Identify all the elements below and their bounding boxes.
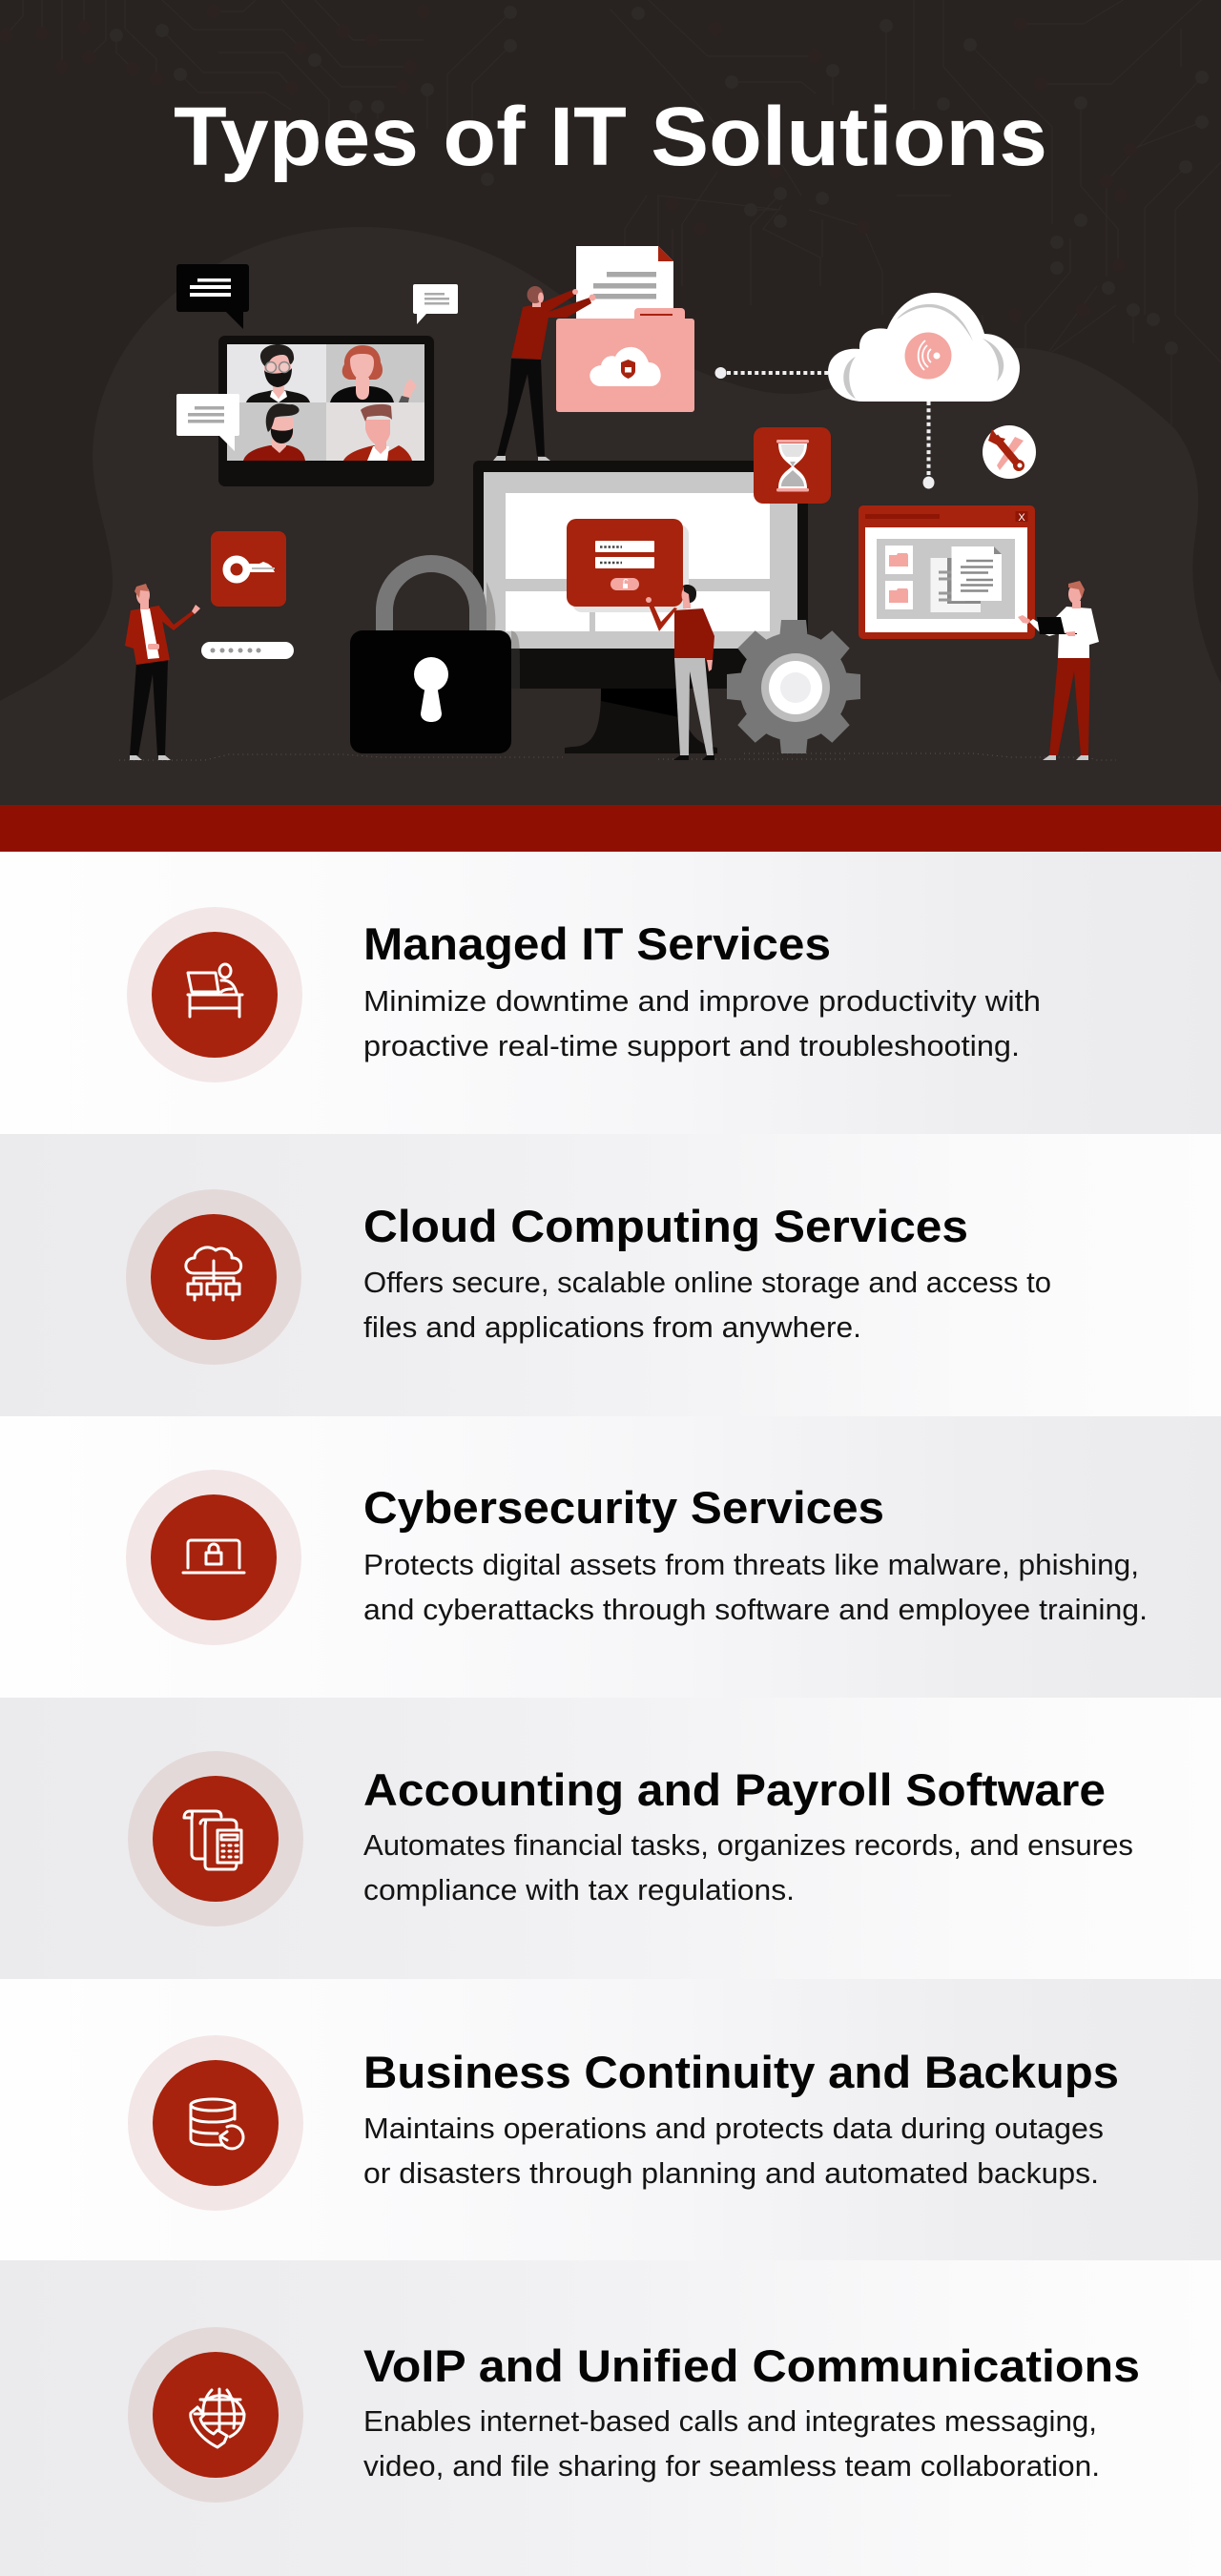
description: Automates financial tasks, organizes records, and ensures	[363, 1828, 1133, 1862]
panel: Managed IT Services	[127, 907, 1041, 1082]
row backgrounds	[0, 852, 1221, 2576]
icon: database backup	[128, 2035, 303, 2211]
person at monitor	[646, 585, 714, 760]
title: Types of IT Solutions	[174, 91, 1047, 183]
login card	[567, 519, 689, 612]
icon: documents and calculator	[128, 1751, 303, 1927]
heading: Accounting and Payroll Software	[363, 1764, 1106, 1815]
heading: Managed IT Services	[363, 918, 831, 969]
speech bubble: black	[176, 264, 249, 329]
document	[576, 246, 673, 324]
dotted connector: cloud to window	[923, 402, 935, 488]
dotted connector: folder to cloud	[715, 367, 828, 379]
icon: cloud network	[126, 1189, 301, 1365]
icon: globe and phone	[128, 2327, 303, 2503]
description: and cyberattacks through software and employee training.	[363, 1593, 1148, 1626]
icon: desk worker	[127, 907, 302, 1082]
participant: man in jacket	[343, 404, 412, 461]
description: Maintains operations and protects data during outages	[363, 2112, 1104, 2145]
description: or disasters through planning and automated backups.	[363, 2156, 1099, 2190]
description: Offers secure, scalable online storage and access to	[363, 1266, 1051, 1299]
heading: Cloud Computing Services	[363, 1201, 968, 1251]
heading: Business Continuity and Backups	[363, 2047, 1119, 2097]
panel: Cloud Computing Services	[126, 1189, 1051, 1365]
video call tablet	[218, 336, 434, 486]
participant: glasses man	[246, 344, 310, 402]
background blob	[0, 227, 1221, 805]
ground dots	[119, 753, 1116, 760]
icon: laptop lock	[126, 1470, 301, 1645]
panel: Accounting and Payroll Software	[128, 1751, 1133, 1927]
heading: Cybersecurity Services	[363, 1482, 884, 1533]
key card	[211, 531, 286, 607]
panel: VoIP and Unified Communications	[128, 2327, 1140, 2503]
speech bubble: white left	[176, 394, 239, 451]
padlock	[350, 564, 520, 753]
hourglass card	[754, 427, 831, 504]
person with key	[125, 584, 200, 760]
panel: header background	[0, 0, 1221, 805]
tools icon	[983, 425, 1036, 479]
app window: X	[1018, 512, 1025, 524]
participant: red-haired woman	[330, 345, 417, 402]
description: Enables internet-based calls and integrates messaging,	[363, 2404, 1097, 2438]
red band	[0, 805, 1221, 852]
password field	[201, 642, 294, 659]
description: Minimize downtime and improve productivity with	[363, 984, 1041, 1018]
heading: VoIP and Unified Communications	[363, 2340, 1140, 2391]
person with laptop	[1018, 581, 1099, 760]
gear	[727, 620, 860, 753]
panel: Cybersecurity Services	[126, 1470, 1148, 1645]
description: Protects digital assets from threats like malware, phishing,	[363, 1548, 1139, 1581]
person reaching to document	[493, 286, 595, 461]
app window	[859, 505, 1035, 639]
description: compliance with tax regulations.	[363, 1873, 795, 1906]
description: files and applications from anywhere.	[363, 1310, 861, 1344]
panel: Business Continuity and Backups	[128, 2035, 1119, 2211]
participant: bearded man	[243, 403, 305, 461]
description: video, and file sharing for seamless team collaboration.	[363, 2449, 1100, 2483]
description: proactive real-time support and troubleshooting.	[363, 1029, 1020, 1062]
speech bubble: white right	[413, 284, 458, 324]
cloud	[828, 293, 1020, 402]
folder with cloud	[556, 308, 694, 412]
monitor	[473, 461, 808, 753]
